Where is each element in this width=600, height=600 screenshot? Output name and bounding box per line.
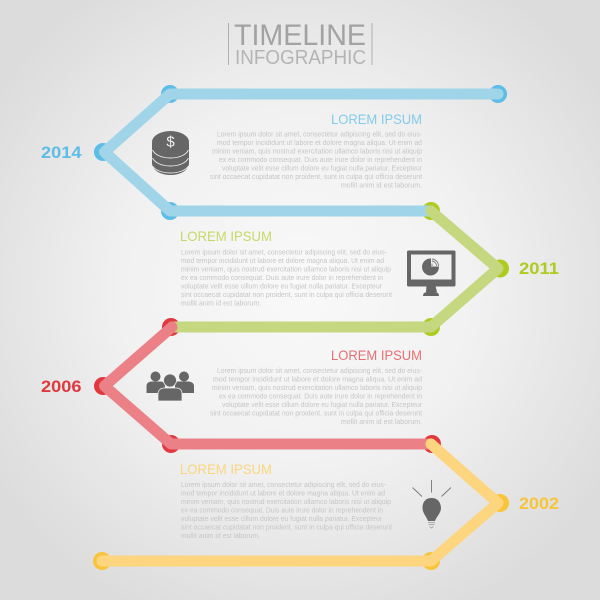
text block 4: Lorem ipsum dolor sit amet, consectetur adipiscing elit, sed do eius- <box>181 480 386 489</box>
title: INFOGRAPHIC <box>235 46 366 69</box>
year 2011: 2011 <box>519 259 559 278</box>
text block 2 <box>181 248 393 308</box>
text block 1: mollit anim id est laborum. <box>341 180 422 190</box>
text block 1: minim veniam, quis nostrud exercitation ullamco laboris nisi ut aliquip <box>212 146 422 156</box>
text block 3: mollit anim id est laborum. <box>341 417 422 426</box>
heading 2: LOREM IPSUM <box>180 228 272 244</box>
year 2002: 2002 <box>519 494 559 513</box>
title: TIMELINE <box>234 19 366 52</box>
text block 4: sint occaecat cupidatat non proident, sunt in culpa qui officia deserunt <box>181 522 393 532</box>
year 2006: 2006 <box>41 377 82 396</box>
text block 2: Lorem ipsum dolor sit amet, consectetur adipiscing elit, sed do eius- <box>181 248 387 256</box>
text block 4: minim veniam, quis nostrud exercitation ullamco laboris nisi ut aliquip <box>181 497 391 506</box>
year 2014: 2014 <box>41 143 82 162</box>
text block 1: voluptate velit esse cillum dolore eu fugiat nulla pariatur. Excepteur <box>222 164 422 172</box>
text block 4: ex ea commodo consequat. Duis aute irure dolor in reprehendent in <box>181 506 383 514</box>
text block 2: voluptate velit esse cillum dolore eu fugiat nulla pariatur. Excepteur <box>181 282 382 290</box>
text block 2: mod tempor incididunt ut labore et dolore magna aliqua. Ut enim ad <box>181 256 384 265</box>
text block 3 <box>210 366 423 426</box>
text block 1: sint occaecat cupidatat non proident, sunt in culpa qui officia deserunt <box>210 172 423 181</box>
text block 1: ex ea commodo consequat. Duis aute irure dolor in reprehendent in <box>219 155 422 164</box>
heading 3: LOREM IPSUM <box>331 347 422 363</box>
text block 2: mollit anim id est laborum. <box>181 298 261 308</box>
icon: group of people <box>146 372 194 401</box>
text block 3: mod tempor incididunt ut labore et dolore magna aliqua. Ut enim ad <box>213 374 422 384</box>
yellow timeline segment <box>102 444 498 561</box>
title <box>228 19 372 69</box>
red timeline segment <box>104 327 431 444</box>
heading 1: LOREM IPSUM <box>331 111 422 127</box>
heading 4: LOREM IPSUM <box>180 461 272 477</box>
text block 3: ex ea commodo consequat. Duis aute irure dolor in reprehendent in <box>219 392 422 400</box>
text block 1: mod tempor incididunt ut labore et dolore magna aliqua. Ut enim ad <box>217 138 422 147</box>
text block 4: mollit anim id est laborum. <box>181 531 260 540</box>
text block 4: mod tempor incididunt ut labore et dolore magna aliqua. Ut enim ad <box>181 488 385 498</box>
text block 2: minim veniam, quis nostrud exercitation ullamco laboris nisi ut aliquip <box>181 264 391 274</box>
text block 3: Lorem ipsum dolor sit amet, consectetur adipiscing elit, sed do eius- <box>217 366 422 375</box>
text block 1: Lorem ipsum dolor sit amet, consectetur adipiscing elit, sed do eius- <box>217 130 422 138</box>
icon: coin stack: $ <box>166 134 175 150</box>
icon: light bulb <box>412 480 451 528</box>
text block 4: voluptate velit esse cillum dolore eu fugiat nulla pariatur. Excepteur <box>181 514 382 523</box>
icon: coin stack <box>152 131 189 175</box>
icon: monitor with pie chart <box>407 250 456 296</box>
blue timeline segment <box>104 94 498 211</box>
text block 2: ex ea commodo consequat. Duis aute irure dolor in reprehendent in <box>181 273 383 282</box>
text block 3: voluptate velit esse cillum dolore eu fugiat nulla pariatur. Excepteur <box>222 400 422 409</box>
text block 1 <box>210 130 423 190</box>
green timeline segment <box>172 211 498 327</box>
text block 4 <box>181 480 393 540</box>
text block 3: sint occaecat cupidatat non proident, sunt in culpa qui officia deserunt <box>210 408 423 418</box>
timeline dots <box>93 85 509 570</box>
text block 2: sint occaecat cupidatat non proident, sunt in culpa qui officia deserunt <box>181 290 393 299</box>
text block 3: minim veniam, quis nostrud exercitation ullamco laboris nisi ut aliquip <box>212 383 422 392</box>
